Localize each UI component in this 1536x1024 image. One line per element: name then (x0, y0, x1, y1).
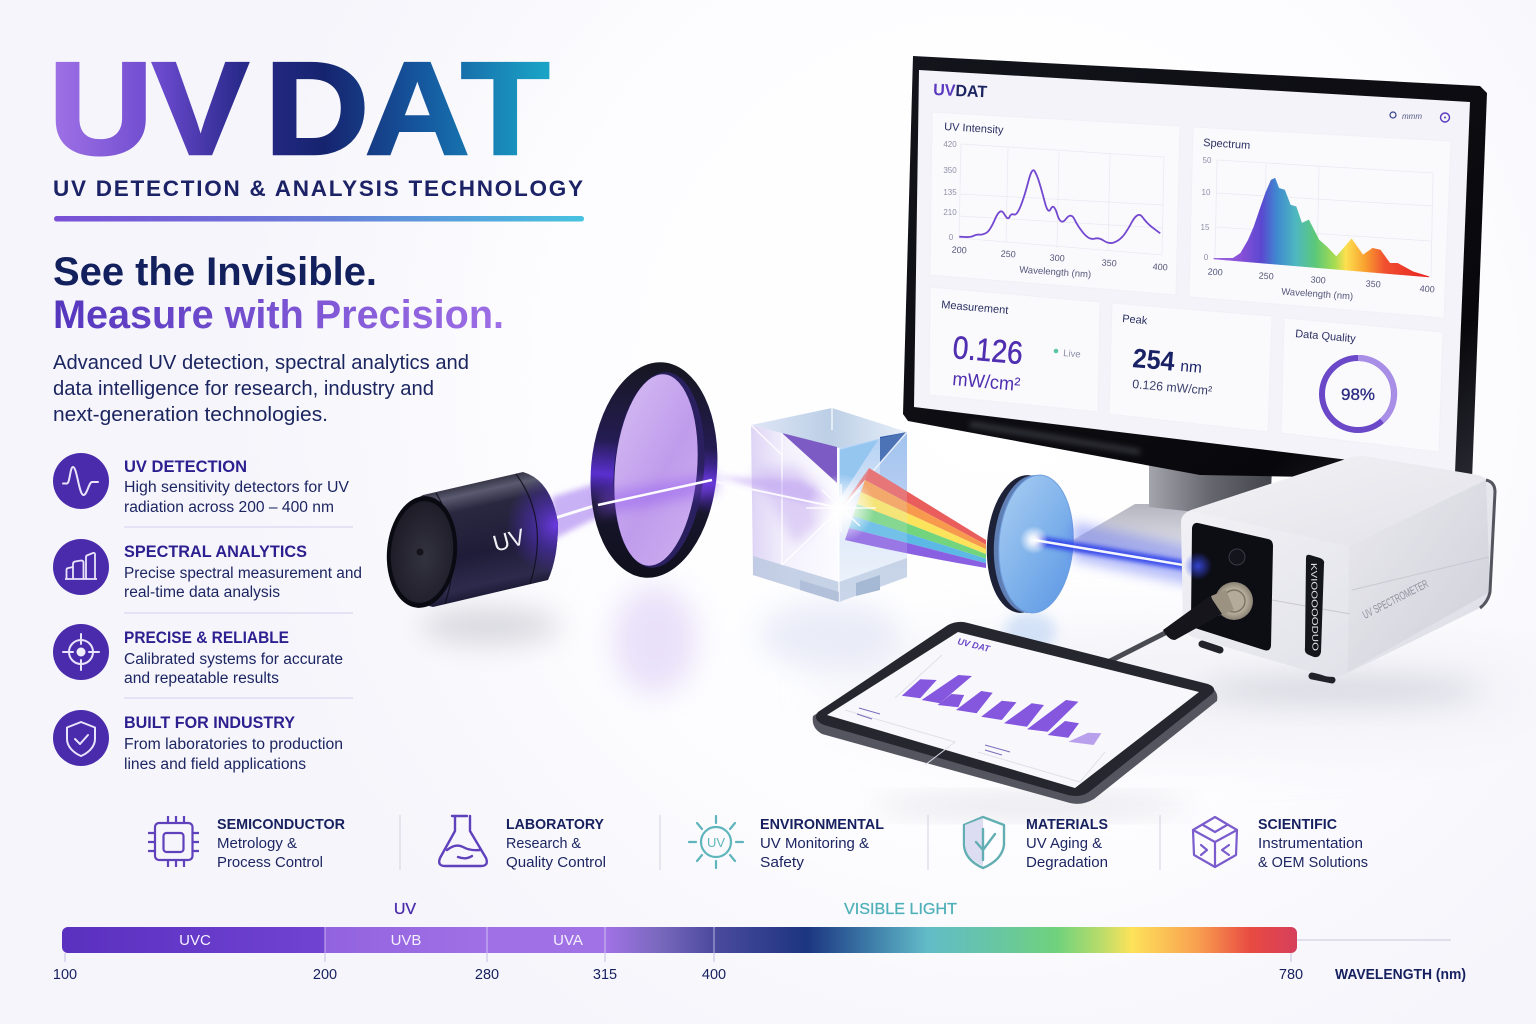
feature: spectral analytics (53, 539, 362, 601)
card: peak: Peak (1122, 313, 1148, 327)
feature: spectral analytics: real-time data analysis (124, 584, 280, 601)
feet (1202, 603, 1468, 680)
intro paragraph: Advanced UV detection, spectral analytics and (53, 352, 469, 374)
card: peak: 0.126 mW/cm² (1132, 377, 1213, 398)
detector panel (1191, 523, 1273, 650)
connecting cable (1108, 632, 1167, 662)
card: spectrum chart: 10 (1202, 188, 1211, 197)
connector (1163, 582, 1253, 640)
card: UV intensity chart: 250 (1000, 248, 1016, 260)
subtitle: UV DETECTION & ANALYSIS TECHNOLOGY (53, 176, 583, 201)
wavelength spectrum bar (53, 927, 1451, 983)
card: peak (1109, 303, 1272, 432)
card: data quality: 98% (1341, 385, 1375, 404)
spectrometer box (1163, 456, 1495, 680)
industry: environmental: Safety (760, 854, 805, 871)
industry: laboratory: LABORATORY (506, 816, 604, 833)
monitor (903, 56, 1487, 480)
blue lens (982, 473, 1078, 615)
industry: materials: MATERIALS (1026, 816, 1108, 833)
intro paragraph: data intelligence for research, industry and (53, 378, 434, 400)
industry: semiconductor (148, 816, 345, 871)
card: data quality: Data Quality (1295, 328, 1357, 345)
status slot (1305, 555, 1324, 657)
industry: scientific: Instrumentation (1258, 835, 1363, 852)
card: measurement: Live (1063, 348, 1081, 361)
feature: precise and reliable: Calibrated systems for accurate (124, 651, 343, 668)
card: measurement: Measurement (941, 299, 1009, 317)
beam: filter to prism (717, 476, 841, 508)
intro paragraph: next-generation technologies. (53, 404, 328, 426)
dashboard status: mmm (1402, 112, 1422, 121)
wavelength spectrum bar: 400 (702, 967, 726, 983)
floor reflections (420, 585, 1536, 813)
wavelength spectrum bar: 315 (593, 967, 617, 983)
monitor stand (1073, 446, 1272, 562)
feature: UV detection: radiation across 200 – 400 nm (124, 499, 334, 516)
wavelength spectrum bar: 100 (53, 967, 77, 983)
headline (53, 250, 504, 337)
cylinder label: UV (490, 523, 528, 557)
card: spectrum chart (1189, 127, 1451, 318)
wavelength spectrum bar: 280 (475, 967, 499, 983)
icon: chip (148, 816, 199, 867)
card: spectrum chart: 50 (1203, 156, 1212, 165)
industry: scientific (1193, 816, 1368, 871)
industry: environmental: UV Monitoring & (760, 835, 869, 852)
wavelength spectrum bar: UVA (553, 932, 583, 949)
feature: built for industry: From laboratories to production (124, 736, 343, 753)
card: UV intensity chart: Wavelength (nm) (1019, 265, 1091, 281)
industry: materials: Degradation (1026, 854, 1108, 871)
tablet bars (902, 675, 1101, 745)
feature: built for industry: lines and field applications (124, 756, 306, 773)
feature: spectral analytics: SPECTRAL ANALYTICS (124, 542, 307, 561)
card: spectrum chart: 0 (1204, 253, 1209, 262)
dashboard logo: UVDAT (933, 81, 988, 101)
icon: UV sun: UV (707, 835, 725, 850)
icon: UV sun (689, 816, 743, 868)
feature: spectral analytics: Precise spectral measurement and (124, 565, 362, 582)
icon: shield (964, 817, 1004, 868)
detector cylinder (382, 472, 558, 611)
card: data quality (1281, 318, 1443, 452)
UV filter disc (582, 357, 726, 583)
card: UV intensity chart: 200 (951, 244, 967, 256)
feature: UV detection (53, 453, 350, 516)
card: UV intensity chart: 300 (1049, 252, 1065, 264)
wavelength spectrum bar: UVC (179, 932, 211, 949)
feature: precise and reliable (53, 624, 343, 687)
industry: semiconductor: SEMICONDUCTOR (217, 816, 345, 833)
card: UV intensity chart: 210 (943, 208, 957, 217)
industry: environmental (689, 816, 884, 871)
industry: scientific: SCIENTIFIC (1258, 816, 1337, 833)
card: UV intensity chart: 135 (943, 188, 957, 197)
card: peak: 254 (1131, 343, 1176, 377)
card: UV intensity chart: 400 (1152, 261, 1168, 273)
blue beam to spectrometer (1020, 522, 1195, 586)
card: spectrum chart: Spectrum (1203, 137, 1251, 152)
card: peak: nm (1180, 358, 1203, 377)
tablet logo: UV DAT (957, 636, 992, 654)
card: measurement: mW/cm² (952, 369, 1021, 396)
headline: See the Invisible. (53, 250, 377, 294)
tablet (813, 622, 1217, 804)
axis label: WAVELENGTH (nm) (1335, 967, 1466, 983)
dashboard status (1390, 112, 1450, 122)
intro paragraph (53, 352, 469, 426)
wavelength spectrum bar: UVB (391, 932, 421, 949)
device label: UV SPECTROMETER (1361, 578, 1431, 622)
icon: flask (439, 816, 487, 866)
industry: environmental: ENVIRONMENTAL (760, 816, 884, 833)
headline: Measure with Precision. (53, 293, 504, 337)
industry: laboratory: Research & (506, 835, 581, 852)
card: measurement: 0.126 (951, 329, 1024, 371)
card: spectrum chart: Wavelength (nm) (1281, 287, 1353, 303)
industry: semiconductor: Process Control (217, 854, 323, 871)
visible light label: VISIBLE LIGHT (844, 901, 957, 918)
feature: built for industry: BUILT FOR INDUSTRY (124, 713, 296, 732)
card: spectrum chart: 400 (1419, 283, 1435, 295)
card: spectrum chart: 250 (1258, 270, 1274, 282)
feature: built for industry (53, 710, 343, 773)
card: UV intensity chart: UV Intensity (944, 121, 1004, 137)
industry: materials: UV Aging & (1026, 835, 1102, 852)
gradient rule (54, 216, 584, 222)
title: UVDAT wordmark: UVDAT (48, 35, 550, 183)
card: spectrum chart: 15 (1201, 223, 1210, 232)
UV band label: UV (394, 901, 416, 918)
industry: materials (964, 816, 1108, 871)
industry: laboratory: Quality Control (506, 854, 606, 871)
feature: UV detection: UV DETECTION (124, 457, 247, 476)
wavelength spectrum bar: 200 (313, 967, 337, 983)
industry: semiconductor: Metrology & (217, 835, 297, 852)
card: UV intensity chart: 420 (943, 140, 957, 149)
card: UV intensity chart: 0 (949, 233, 954, 242)
card: UV intensity chart (930, 112, 1180, 295)
industry: scientific: & OEM Solutions (1258, 854, 1368, 871)
feature: UV detection: High sensitivity detectors for UV (124, 479, 350, 496)
spectrometer box: KVIOOOOODUO (1309, 563, 1321, 652)
card: spectrum chart: 350 (1365, 278, 1381, 290)
feature list (53, 453, 362, 773)
feature: precise and reliable: PRECISE & RELIABLE (124, 628, 289, 647)
purple beam: cylinder through filter (552, 482, 600, 540)
industry: laboratory (439, 816, 606, 871)
glass prism (751, 408, 907, 602)
card: spectrum chart: 200 (1207, 266, 1223, 278)
feature: precise and reliable: and repeatable results (124, 670, 279, 687)
card: UV intensity chart: 350 (943, 166, 957, 175)
icon: cube (1193, 817, 1237, 867)
card: spectrum chart: 300 (1310, 274, 1326, 286)
card: measurement (929, 287, 1100, 412)
card: UV intensity chart: 350 (1101, 257, 1117, 269)
rainbow dispersion (806, 432, 986, 602)
wavelength spectrum bar: 780 (1279, 967, 1303, 983)
